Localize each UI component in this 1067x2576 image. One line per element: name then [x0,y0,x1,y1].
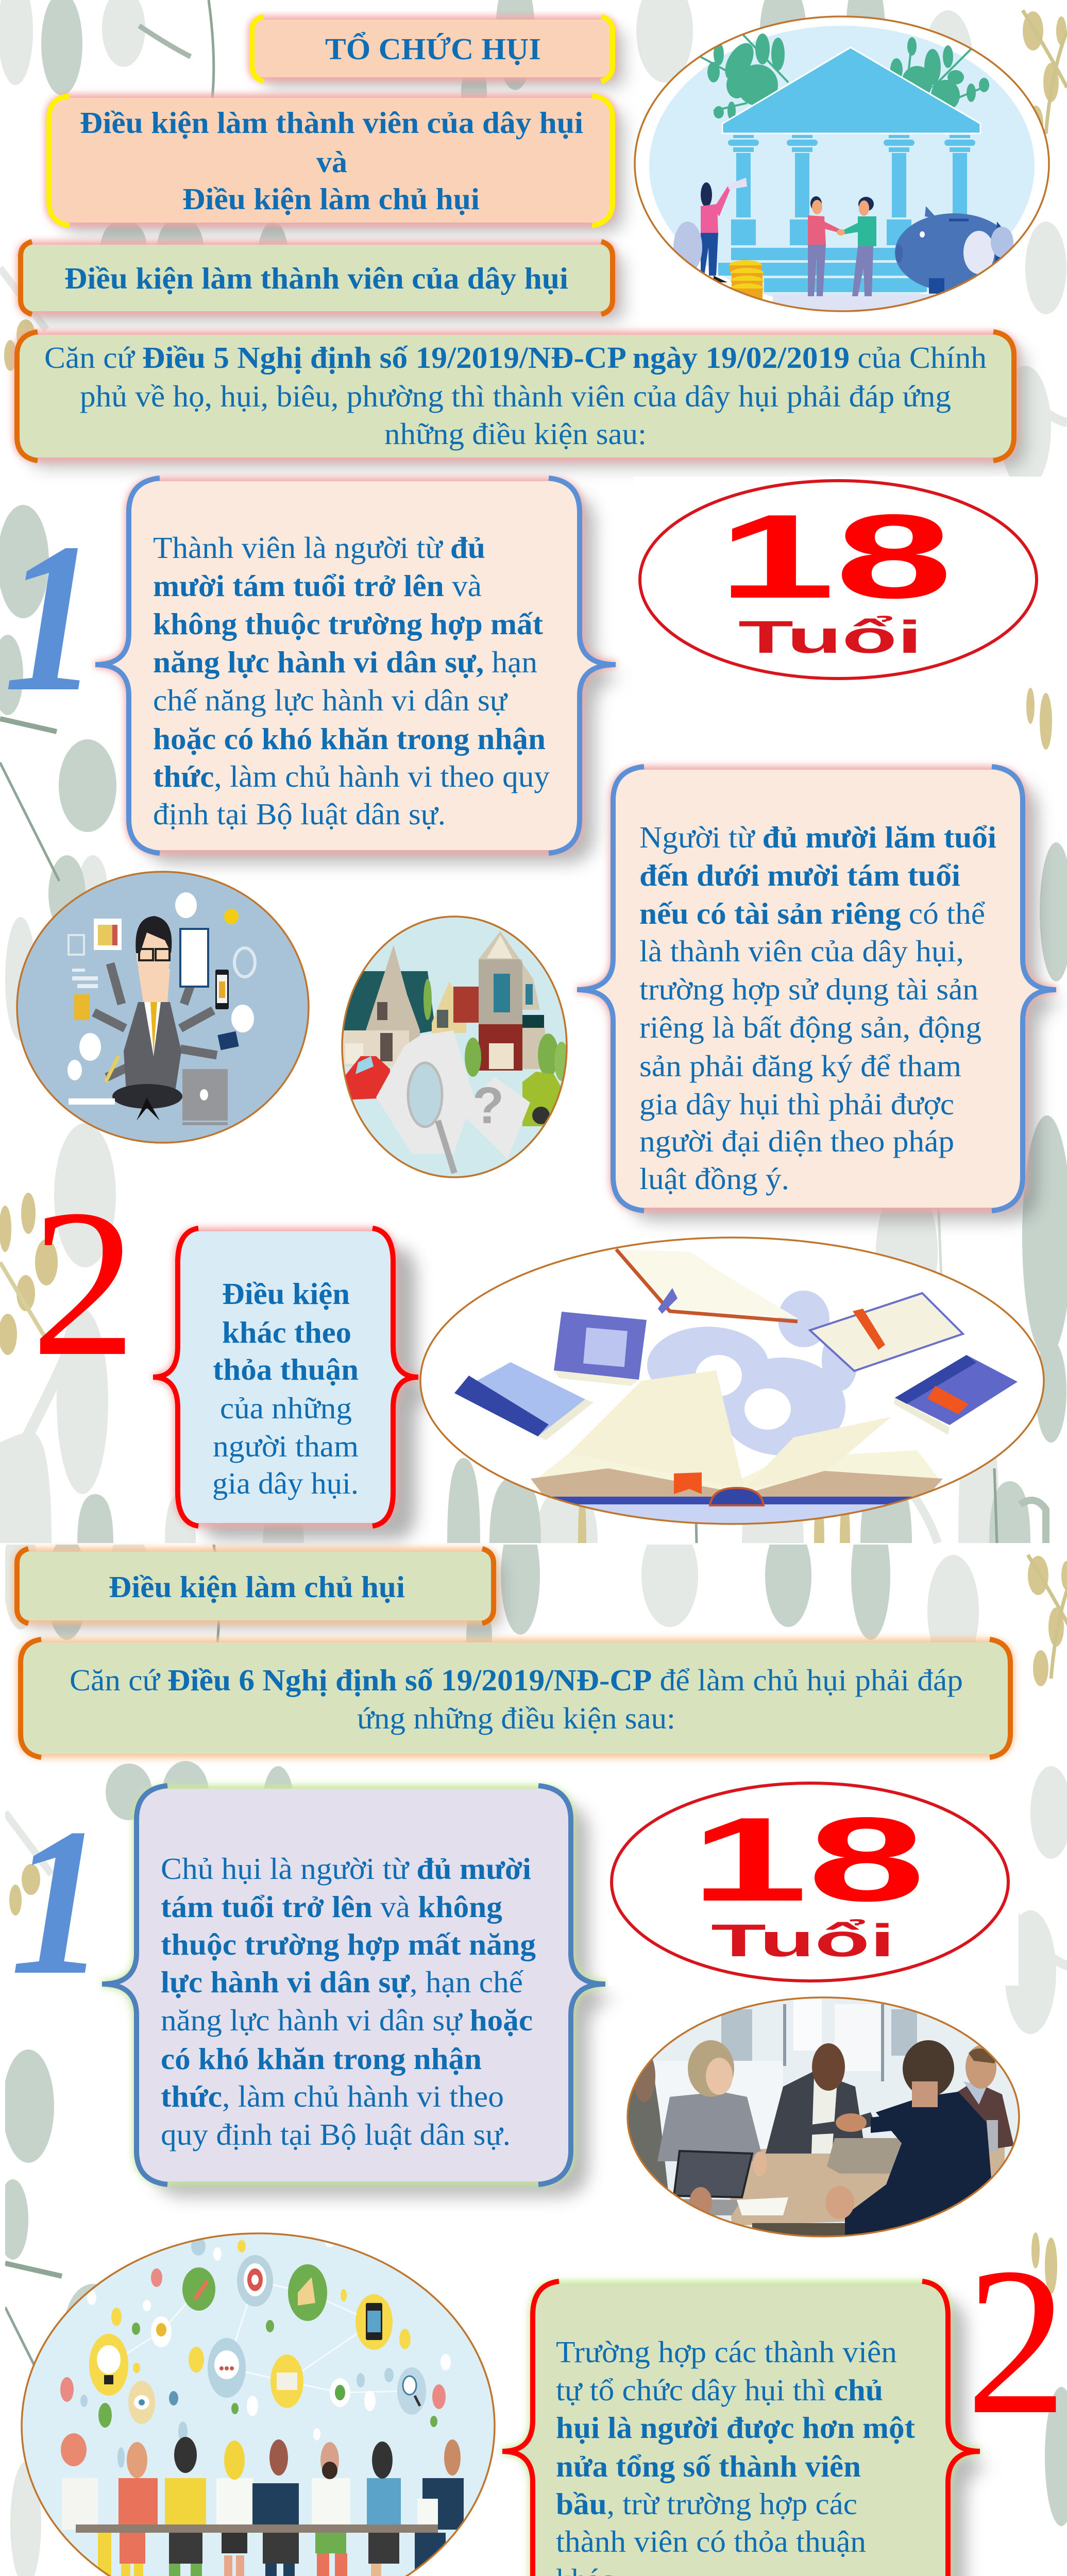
panel: member condition 1: năng lực hành vi dân sự, hạn [153,645,537,679]
panel: age 15 to 18: là thành viên của dây hụi, [639,934,964,968]
badge: 18 tuổi: 18 [690,1793,925,1926]
panel: age 15 to 18: nếu có tài sản riêng có thể [639,896,985,930]
panel: age 15 to 18: luật đồng ý. [639,1162,789,1196]
section heading: host conditions [17,1549,502,1629]
panel: elected by majority: hụi là người được hơn một [556,2411,915,2445]
panel: member condition 1: Thành viên là người từ đủ [153,531,485,565]
panel: host condition 1: tám tuổi trở lên và không [161,1890,502,1924]
panel: age 15 to 18: trường hợp sử dụng tài sản [639,972,978,1006]
panel: host condition 1: thức, làm chủ hành vi theo [161,2079,504,2113]
panel: member condition 1: không thuộc trường hợp mất [153,607,543,641]
section heading: member conditions: Điều kiện làm thành viên của dây hụi [64,261,568,295]
panel: age 15 to 18: đến dưới mười tám tuổi [639,858,960,892]
heading: two conditions: và [316,145,347,179]
illustration: houses and documents [342,917,569,1177]
panel: host condition 1: quy định tại Bộ luật dân sự. [161,2117,511,2151]
illustration: houses and documents: ? [472,1077,504,1134]
panel: other agreed conditions [153,1228,442,1539]
illustration: group of people with idea icons [22,2233,495,2576]
badge: 18 tuổi: Tuổi [711,1914,895,1966]
panel: elected by majority: Trường hợp các thành viên [556,2335,897,2369]
text block: legal basis Article 5: Căn cứ Điều 5 Nghị định số 19/2019/NĐ-CP ngày 19/02/2019 của Chính [44,341,987,375]
panel: member condition 1: hoặc có khó khăn trong nhận [153,722,546,756]
panel: member condition 1: thức, làm chủ hành vi theo quy [153,759,550,793]
heading: two conditions [49,96,624,233]
panel: elected by majority: nửa tổng số thành viên [556,2449,861,2483]
badge: 18 tuổi [608,1778,1019,1986]
panel: age 15 to 18: Người từ đủ mười lăm tuổi [639,820,996,854]
panel: member condition 1 [95,478,631,863]
panel: elected by majority: thành viên có thỏa thuận [556,2524,866,2558]
panel: age 15 to 18: gia dây hụi thì phải được [639,1087,954,1121]
panel: elected by majority: tự tổ chức dây hụi thì chủ [556,2373,883,2407]
badge: 18 tuổi: Tuổi [738,611,922,663]
digit 2: 2 [31,1166,137,1400]
illustration: open books [420,1238,1044,1525]
badge: 18 tuổi: 18 [718,490,953,623]
section heading: host conditions: Điều kiện làm chủ hụi [109,1570,405,1604]
panel: member condition 1: định tại Bộ luật dân sự. [153,797,446,831]
panel: age 15 to 18: sản phải đăng ký để tham [639,1049,961,1083]
heading: two conditions: Điều kiện làm chủ hụi [182,182,480,216]
panel: age 15 to 18: người đại diện theo pháp [639,1124,954,1158]
panel: host condition 1: năng lực hành vi dân sự hoặc [161,2003,533,2037]
text block: legal basis Article 6: ứng những điều kiện sau: [357,1701,675,1735]
heading: two conditions: Điều kiện làm thành viên của dây hụi [80,106,583,140]
section heading: member conditions [21,242,624,321]
panel: host condition 1: Chủ hụi là người từ đủ mười [161,1852,531,1886]
panel: host condition 1: thuộc trường hợp mất năng [161,1927,536,1961]
panel: other agreed conditions: thỏa thuận [213,1352,359,1386]
panel: other agreed conditions: Điều kiện [222,1277,350,1311]
text block: legal basis Article 5: những điều kiện sau: [384,417,647,451]
digit 1: 1 [10,1785,106,2019]
panel: other agreed conditions: khác theo [222,1315,351,1349]
panel: host condition 1 [102,1786,623,2197]
panel: elected by majority [502,2281,998,2576]
panel: other agreed conditions: của những [220,1391,352,1425]
digit 1: 1 [4,499,99,736]
heading: TỔ CHỨC HỤI: TỔ CHỨC HỤI [325,32,541,66]
panel: elected by majority: bầu, trừ trường hợp các [556,2487,857,2521]
illustration: business meeting handshake [618,1994,1030,2236]
heading: TỔ CHỨC HỤI [252,16,624,88]
text block: legal basis Article 5 [17,332,1025,468]
text block: legal basis Article 5: phủ về họ, hụi, biêu, phường thì thành viên của dây hụi phải đáp ứng [80,379,951,413]
text block: legal basis Article 6: Căn cứ Điều 6 Nghị định số 19/2019/NĐ-CP để làm chủ hụi phải đáp [70,1663,963,1697]
illustration: multitasking businessman [17,872,309,1143]
panel: age 15 to 18 [577,767,1067,1221]
panel: member condition 1: mười tám tuổi trở lên và [153,569,482,603]
panel: host condition 1: lực hành vi dân sự , hạn chế [161,1965,524,1999]
text block: legal basis Article 6 [21,1639,1010,1757]
illustration: bank and handshake [635,16,1049,315]
panel: age 15 to 18: riêng là bất động sản, động [639,1010,981,1044]
panel: member condition 1: chế năng lực hành vi dân sự [153,683,508,717]
panel: other agreed conditions: gia dây hụi. [212,1466,359,1500]
badge: 18 tuổi [634,477,1046,683]
panel: host condition 1: có khó khăn trong nhận [161,2042,482,2076]
panel: other agreed conditions: người tham [213,1429,359,1463]
